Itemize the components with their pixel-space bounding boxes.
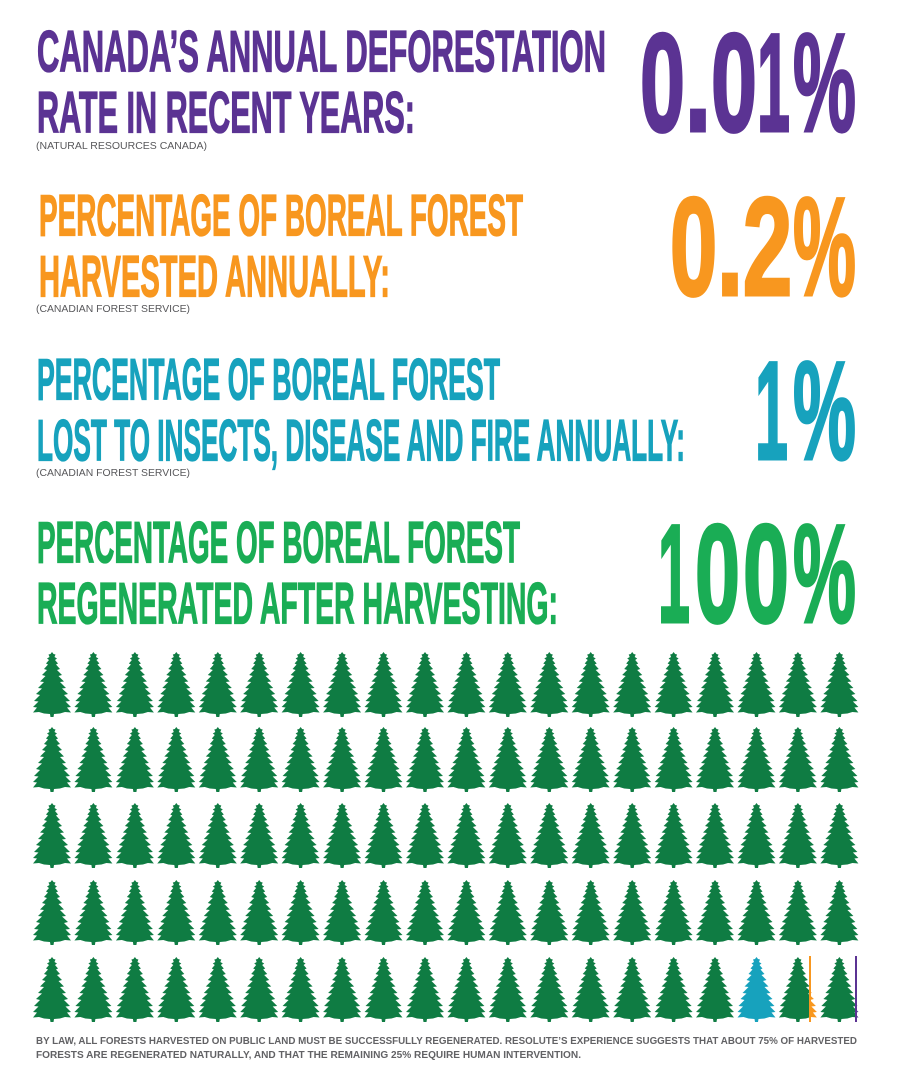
panel: deforestation rate [36,4,856,161]
stat: 100%: 0 [743,495,789,652]
footnote: BY LAW, ALL FORESTS HARVESTED ON PUBLIC LAND MUST BE SUCCESSFULLY REGENERATED. RESOLUTE’S EXPERIENCE SUGGESTS THAT ABOUT 75% OF HARVESTED [36,1035,857,1047]
source: Canadian Forest Service: (CANADIAN FOREST SERVICE) [36,304,190,315]
stat: 0.01%: 0 [640,4,685,161]
heading: deforestation rate: RATE IN RECENT YEARS: [37,80,415,146]
tree row 3 [33,803,858,868]
stat: 0.01%: 1 [757,4,790,161]
stat: 100% [658,495,856,652]
footnote [36,1035,857,1061]
icon: teal tree, 1% lost [738,957,776,1022]
stat: 0.2%: 0 [670,168,717,325]
tree row 5 [33,956,858,1022]
panel: boreal forest lost [36,332,856,489]
icon: green tree with orange slice, 0.2% harvested [779,956,817,1022]
footnote: FORESTS ARE REGENERATED NATURALLY, AND THAT THE REMAINING 25% REQUIRE HUMAN INTERVENTION. [36,1049,581,1061]
tree row 1 [33,652,858,717]
tree row 4 [33,880,858,945]
heading: harvested annually: HARVESTED ANNUALLY: [39,244,390,310]
heading: deforestation rate [37,20,606,146]
heading: lost to insects, disease and fire [37,348,685,474]
icon: green tree with purple slice, 0.01% deforested [820,956,858,1022]
stat: 0.2%: 2 [743,168,792,325]
heading: regenerated after harvesting [37,510,558,636]
source: Canadian Forest Service: (CANADIAN FOREST SERVICE) [36,468,190,479]
tree row 2 [33,727,858,792]
source: Natural Resources Canada: (NATURAL RESOURCES CANADA) [36,141,207,152]
stat: 0.01%: 0 [711,4,757,161]
stat: 100%: 0 [695,495,740,652]
chart: 100 tree pictogram [33,652,858,1022]
stat: 0.2% [670,168,856,325]
stat: 0.01% [640,4,856,161]
stat: 1%: 1 [755,332,788,489]
panel: boreal forest harvested [36,168,856,325]
stat: 100%: 1 [658,495,690,652]
panel: boreal forest regenerated [37,495,856,652]
heading: harvested annually [39,184,523,310]
stat: 0.01%: . [684,4,712,161]
stat: 0.2%: . [716,168,744,325]
